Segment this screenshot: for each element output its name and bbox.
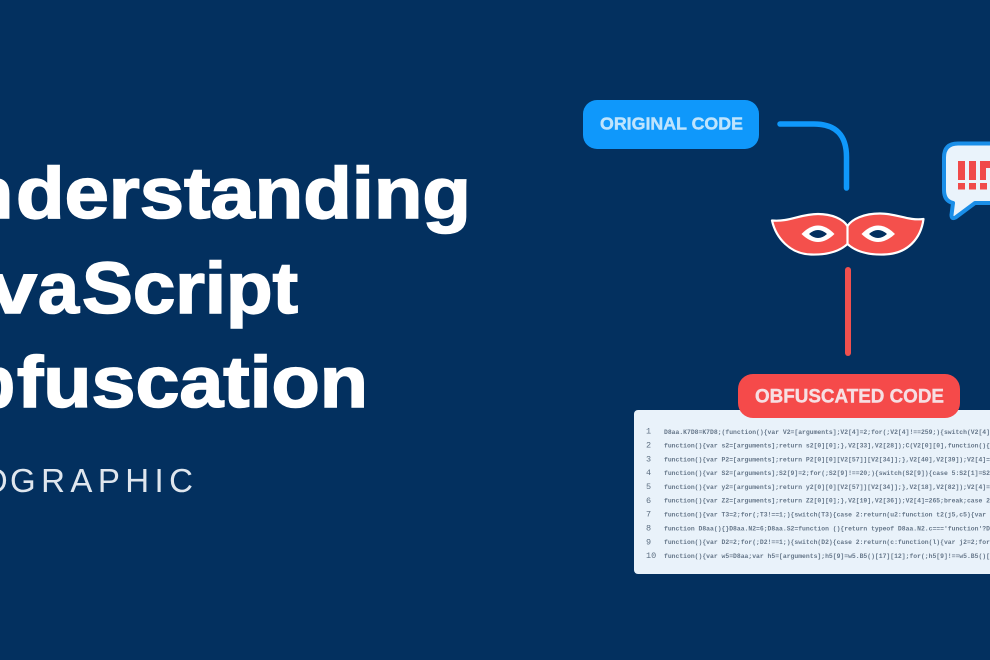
line numbers: 3	[646, 454, 651, 464]
label: obfuscated code: OBFUSCATED CODE	[755, 386, 944, 407]
code lines: function(){var T3=2;for(;T3!==1;){switch(T3){case 2:return(u2:function t2(j5,c5){var	[664, 512, 986, 518]
code lines: D8aa.K7D8=K7D8;(function(){var V2=[arguments];V2[4]=2;for(;V2[4]!==259;){switch(V2[4]	[664, 429, 990, 436]
line numbers: 8	[646, 524, 651, 534]
line numbers: 7	[646, 510, 651, 520]
icon: mask	[772, 214, 924, 255]
panel: code listing	[634, 410, 990, 574]
code lines: function(){var y2=[arguments];return y2[0][0][V2[57]][V2[34]];},V2[18],V2[82]);V2[4]=	[664, 484, 990, 491]
line numbers: 4	[646, 468, 651, 478]
line numbers: 9	[646, 538, 651, 548]
line numbers: 2	[646, 440, 651, 450]
title: a	[38, 249, 80, 329]
line numbers: 6	[646, 496, 651, 506]
label: original code	[583, 100, 759, 149]
subtitle: GRAPHIC	[10, 462, 193, 499]
line numbers	[646, 426, 656, 561]
title: Script	[82, 249, 298, 329]
line numbers: 5	[646, 482, 651, 492]
code lines: function(){var Z2=[arguments];return Z2[0][0];},V2[19],V2[36]);V2[4]=265;break;case 2	[664, 498, 990, 504]
code lines: function(){var D2=2;for(;D2!==1;){switch(D2){case 2:return(c:function(l){var j2=2;for	[664, 539, 990, 546]
code lines: function D8aa(){}D8aa.N2=6;D8aa.S2=function (){return typeof D8aa.N2.c==='function'?D	[664, 526, 990, 532]
title: derstanding	[16, 154, 471, 234]
code lines	[664, 429, 990, 560]
icon: speech bubble	[944, 144, 990, 218]
label: original code: ORIGINAL CODE	[600, 114, 743, 134]
label: obfuscated code	[738, 374, 960, 418]
code lines: function(){var s2=[arguments];return s2[0][0];},V2[33],V2[28]);C(V2[0][0],function(){	[664, 442, 990, 450]
line numbers: 10	[646, 551, 656, 561]
code lines: function(){var S2=[arguments];S2[9]=2;for(;S2[9]!==20;){switch(S2[9]){case 5:S2[1]=S2	[664, 470, 990, 477]
line numbers: 1	[646, 426, 651, 436]
arrow: original code to mask	[780, 124, 846, 188]
code lines: function(){var P2=[arguments];return P2[0][0][V2[57]][V2[34]];},V2[40],V2[39]);V2[4]=	[664, 456, 990, 464]
title: fuscation	[17, 343, 368, 423]
title	[0, 154, 471, 423]
code lines: function(){var w5=D8aa;var h5=[arguments];h5[9]=w5.B5()[17][12];for(;h5[9]!==w5.B5()[	[664, 553, 990, 560]
arrow: mask to obfuscated code	[845, 270, 851, 353]
